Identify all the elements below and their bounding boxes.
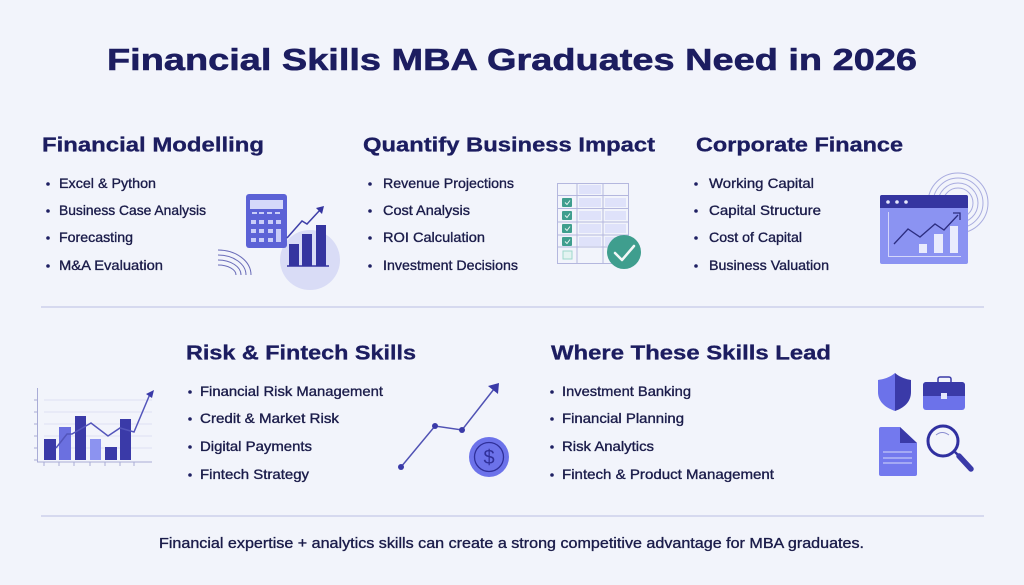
list: risk and fintech skills: Financial Risk Management	[200, 383, 383, 399]
list: risk and fintech skills: Credit & Market Risk	[200, 410, 340, 426]
list: career paths: Fintech & Product Management	[562, 466, 774, 482]
icon: shield	[878, 373, 911, 411]
icon: growth line and dollar coin: $	[483, 447, 495, 469]
list: financial modelling skills: M&A Evaluation	[59, 257, 163, 273]
heading: risk and fintech: Risk & Fintech Skills	[186, 342, 416, 364]
list: risk and fintech skills	[188, 383, 383, 482]
heading: financial modelling: Financial Modelling	[42, 134, 264, 156]
icon: calculator with bar chart	[218, 194, 340, 290]
panel: risk and fintech skills	[34, 342, 509, 482]
footer note: Financial expertise + analytics skills can create a strong competitive advantage for MBA graduates.	[159, 536, 864, 552]
divider	[41, 306, 984, 308]
list: corporate finance skills: Business Valuation	[709, 257, 829, 273]
heading: where these skills lead: Where These Skills Lead	[551, 342, 831, 364]
panel: corporate finance	[694, 134, 988, 273]
list: financial modelling skills: Forecasting	[59, 229, 133, 245]
icon: briefcase	[923, 377, 965, 410]
icon: growth line and dollar coin	[398, 383, 509, 477]
list: risk and fintech skills: Digital Payments	[200, 438, 312, 454]
list: business impact skills: Investment Decisions	[383, 257, 518, 273]
panel: financial modelling	[42, 134, 340, 290]
list: financial modelling skills: Excel & Python	[59, 175, 156, 191]
list: corporate finance skills: Cost of Capital	[709, 229, 802, 245]
heading: corporate finance: Corporate Finance	[696, 134, 903, 156]
list: financial modelling skills	[46, 175, 206, 273]
icon: checklist table	[557, 183, 641, 269]
chart: bars with trend line	[34, 388, 154, 466]
list: career paths: Financial Planning	[562, 410, 684, 426]
list: business impact skills: Revenue Projections	[383, 175, 514, 191]
heading: quantify business impact: Quantify Business Impact	[363, 134, 655, 156]
list: corporate finance skills	[694, 175, 829, 273]
list: business impact skills	[368, 175, 518, 273]
icon: browser window chart	[880, 173, 988, 264]
icon: magnifying glass	[928, 426, 971, 469]
list: risk and fintech skills: Fintech Strategy	[200, 466, 309, 482]
title: Financial Skills MBA Graduates Need in 2026	[107, 42, 917, 77]
panel: quantify business impact	[363, 134, 655, 273]
list: career paths: Risk Analytics	[562, 438, 654, 454]
list: corporate finance skills: Working Capital	[709, 175, 814, 191]
list: financial modelling skills: Business Case Analysis	[59, 202, 206, 218]
list: career paths	[550, 383, 774, 482]
icon: document	[879, 427, 917, 476]
panel: where these skills lead	[550, 342, 971, 482]
list: business impact skills: ROI Calculation	[383, 229, 485, 245]
list: business impact skills: Cost Analysis	[383, 202, 470, 218]
divider	[41, 515, 984, 517]
list: corporate finance skills: Capital Structure	[709, 202, 821, 218]
list: career paths: Investment Banking	[562, 383, 691, 399]
